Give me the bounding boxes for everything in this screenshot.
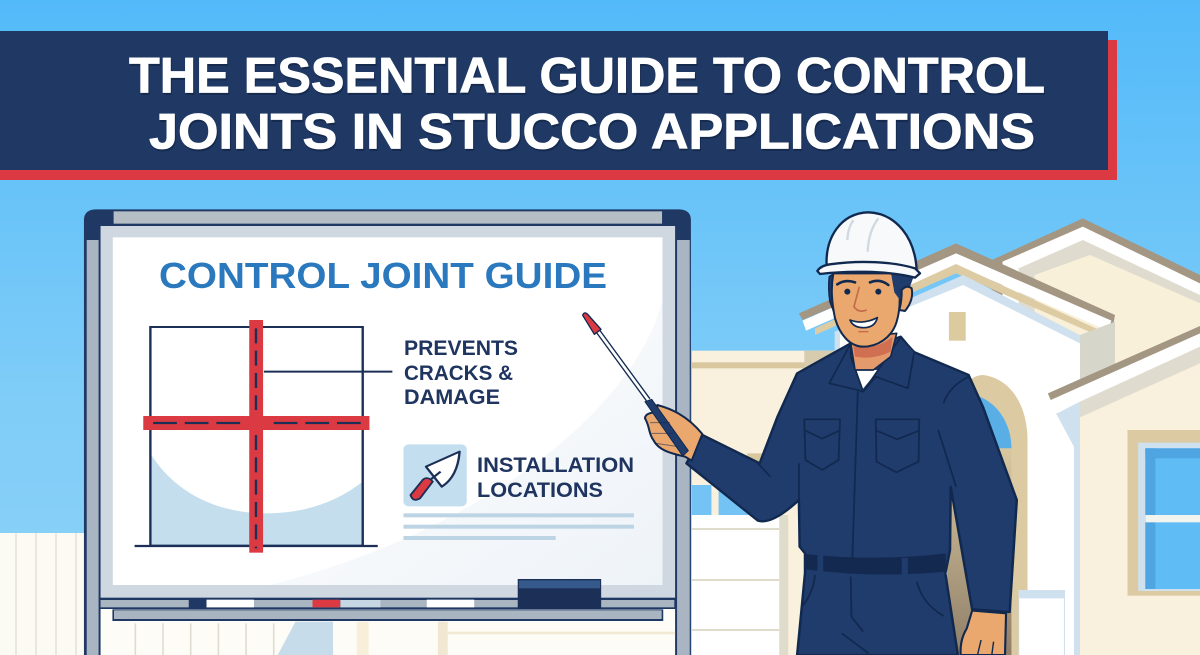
background: suburban houses (692, 218, 1200, 655)
control joint wall diagram (135, 320, 392, 553)
board heading: CONTROL JOINT GUIDE (159, 255, 607, 296)
worker in hard hat and navy coveralls (583, 212, 1017, 655)
body and coveralls (686, 337, 1017, 655)
banner navy panel (0, 31, 1108, 170)
callout: prevents cracks and damage: DAMAGE (404, 386, 500, 409)
title text: JOINTS IN STUCCO APPLICATIONS (150, 106, 1036, 162)
house: garage wing with window and door (692, 351, 842, 655)
eraser (518, 579, 601, 609)
callout: installation locations: LOCATIONS (477, 479, 603, 502)
title banner (0, 31, 1117, 180)
belt (805, 553, 946, 575)
pointer and hand (583, 313, 702, 461)
banner red shadow (0, 40, 1117, 180)
callout: prevents cracks and damage: PREVENTS (404, 337, 518, 360)
placeholder text lines (403, 513, 634, 540)
whiteboard (84, 209, 691, 655)
chest pockets (804, 419, 919, 472)
callout: installation locations (477, 454, 634, 502)
house: central stucco tower with gable (799, 243, 1115, 655)
callout: installation locations: INSTALLATION (477, 454, 634, 477)
background: white fence at left (0, 533, 90, 655)
house: rear right wing (992, 218, 1200, 467)
hand at side (961, 611, 1006, 655)
marker tray (100, 598, 675, 621)
view below tray between the legs (101, 608, 675, 655)
board frame (84, 209, 691, 655)
icon: trowel (403, 444, 467, 506)
house: arched entry (947, 375, 1065, 655)
head and hard hat (817, 212, 920, 370)
hard hat (827, 212, 917, 270)
title text: THE ESSENTIAL GUIDE TO CONTROL (130, 50, 1046, 106)
callout: prevents cracks and damage: CRACKS & (404, 362, 513, 385)
callout: prevents cracks and damage (404, 337, 518, 409)
house: front right wing with window (1048, 326, 1200, 655)
title text: JOINTS IN STUCCO APPLICATIONS (149, 104, 1035, 160)
title text: THE ESSENTIAL GUIDE TO CONTROL (129, 48, 1045, 104)
title text (129, 48, 1046, 162)
board surface (113, 237, 662, 585)
